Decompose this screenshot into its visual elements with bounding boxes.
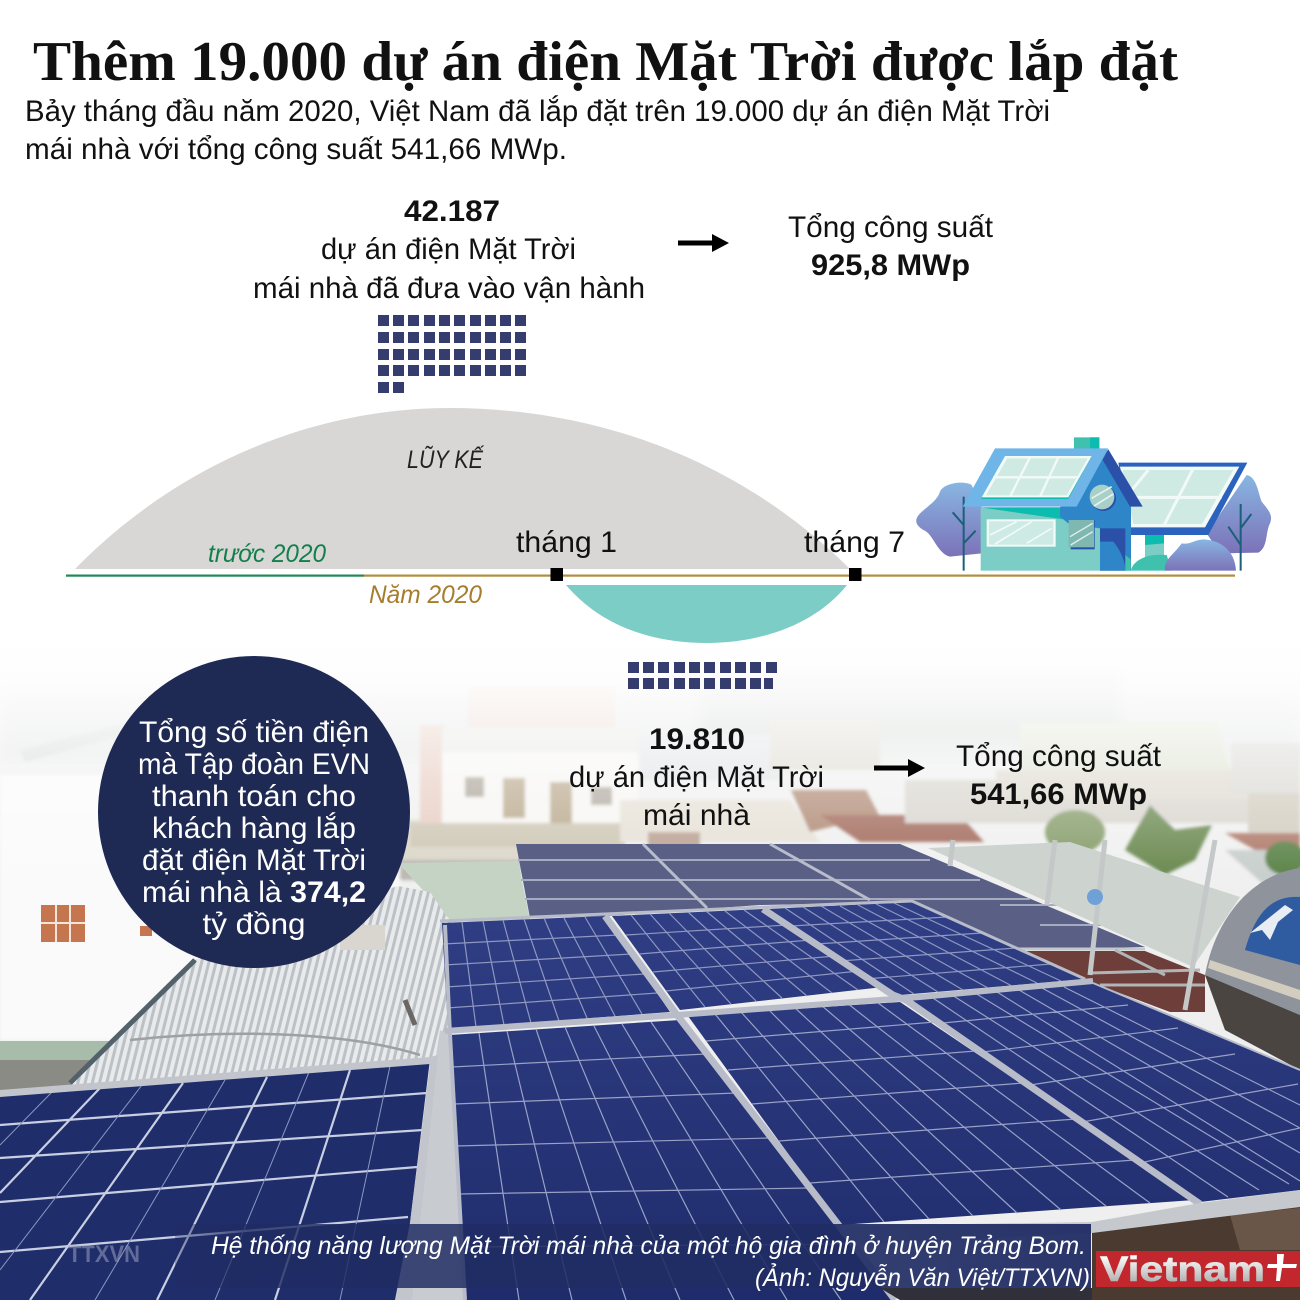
label: before 2020: trước 2020 — [208, 540, 326, 568]
stat: cumulative projects — [253, 195, 645, 305]
callout: EVN payment: mái nhà là 374,2 — [142, 876, 366, 909]
stat: cumulative projects: mái nhà đã đưa vào vận hành — [253, 272, 645, 305]
stat: 2020 projects — [569, 723, 824, 832]
middle row solar panels — [442, 902, 1086, 1029]
caption bar: Hệ thống năng lượng Mặt Trời mái nhà của một hộ gia đình ở huyện Trảng Bom. — [211, 1232, 1086, 1260]
bottom-left solar panel — [0, 1055, 438, 1300]
stat: 2020 projects: 19.810 — [649, 723, 745, 756]
teal segment: 2020 — [566, 585, 847, 643]
hazy tree line — [0, 670, 1300, 760]
silver frame strip — [837, 1190, 1300, 1245]
right grey roof — [928, 842, 1240, 967]
intro text: Bảy tháng đầu năm 2020, Việt Nam đã lắp đặt trên 19.000 dự án điện Mặt Trời — [25, 95, 1050, 128]
watermark TTXVN: TTXVN — [68, 1241, 140, 1268]
stat: cumulative projects: 42.187 — [404, 195, 500, 228]
callout: EVN payment: thanh toán cho — [152, 780, 356, 813]
square pictogram: 2020 projects — [628, 662, 777, 689]
callout: EVN payment: khách hàng lắp — [152, 812, 356, 845]
stat: cumulative projects: dự án điện Mặt Trời — [321, 233, 576, 266]
stat: 2020 projects: dự án điện Mặt Trời — [569, 761, 824, 794]
stat: 2020 capacity: Tổng công suất — [956, 740, 1162, 773]
stat: 2020 capacity — [956, 740, 1162, 811]
stat: 2020 capacity: 541,66 MWp — [970, 778, 1147, 811]
stat: cumulative capacity — [788, 211, 994, 282]
intro text — [25, 95, 1050, 166]
title: Thêm 19.000 dự án điện Mặt Trời được lắp đặt — [33, 31, 1178, 93]
logo: Vietnam+ — [1096, 1250, 1300, 1289]
square pictogram: cumulative projects — [378, 315, 526, 393]
green roof — [398, 861, 530, 922]
callout: EVN payment: Tổng số tiền điện — [139, 716, 369, 749]
fog overlay — [0, 640, 1300, 900]
callout: EVN payment: đặt điện Mặt Trời — [142, 844, 366, 877]
logo: Vietnam+: Vietnam — [1100, 1250, 1265, 1289]
stat: cumulative capacity: Tổng công suất — [788, 211, 994, 244]
brick vent blocks — [41, 905, 152, 942]
caption bar — [175, 1224, 1091, 1292]
under-frame red structure — [950, 840, 1215, 1012]
green ground and concrete — [0, 1041, 120, 1095]
label: month 7: tháng 7 — [804, 526, 905, 559]
callout: EVN payment: tỷ đồng — [202, 908, 306, 941]
label: month 1: tháng 1 — [516, 526, 617, 559]
back solar array — [516, 844, 1145, 950]
timeline — [66, 568, 1235, 581]
label: cumulative: LŨY KẾ — [407, 444, 485, 474]
corrugated roof — [70, 886, 456, 1090]
background photo: rooftop solar panels — [0, 640, 1300, 1300]
stat: 2020 projects: mái nhà — [643, 799, 750, 832]
gap between bottom-left panel and lower row — [395, 1030, 465, 1300]
callout: EVN payment: mà Tập đoàn EVN — [138, 748, 370, 781]
grey dome: cumulative — [75, 408, 850, 569]
callout: EVN payment — [98, 656, 410, 968]
label: year 2020: Năm 2020 — [369, 581, 482, 609]
arrow: cumulative to capacity — [678, 234, 729, 252]
stat: cumulative capacity: 925,8 MWp — [811, 249, 970, 282]
dark structure below panels — [880, 1205, 1300, 1300]
caption bar: (Ảnh: Nguyễn Văn Việt/TTXVN) — [755, 1261, 1090, 1292]
lower row solar panels — [450, 983, 1300, 1300]
arrow: 2020 projects to capacity — [874, 759, 925, 777]
intro text: mái nhà với tổng công suất 541,66 MWp. — [25, 133, 567, 166]
panel frames — [440, 901, 1300, 1300]
icon: house with solar panels — [916, 437, 1271, 571]
water tank — [1205, 868, 1300, 1070]
background buildings — [0, 687, 1300, 1040]
